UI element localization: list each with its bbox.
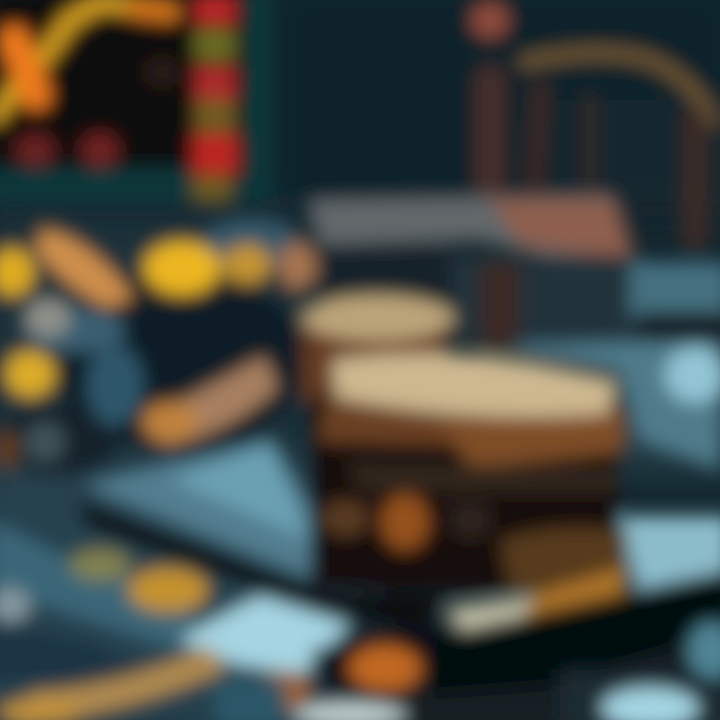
front coin stack — [310, 354, 628, 624]
red and yellow ticker column — [195, 0, 235, 25]
monitor: chart screen — [0, 0, 272, 202]
front coin top face — [332, 354, 616, 417]
foreground map: gold swirls — [0, 520, 285, 720]
keyboard: blue and yellow keys — [0, 219, 317, 475]
back coin stack — [302, 295, 454, 403]
chart dots: red markers — [15, 134, 55, 166]
back glass stack — [310, 195, 720, 350]
chart line: orange — [0, 2, 170, 115]
tablet: light blue slab — [76, 340, 720, 626]
foreground paper and dark pen — [176, 570, 720, 720]
top right: brown arches — [471, 2, 712, 240]
